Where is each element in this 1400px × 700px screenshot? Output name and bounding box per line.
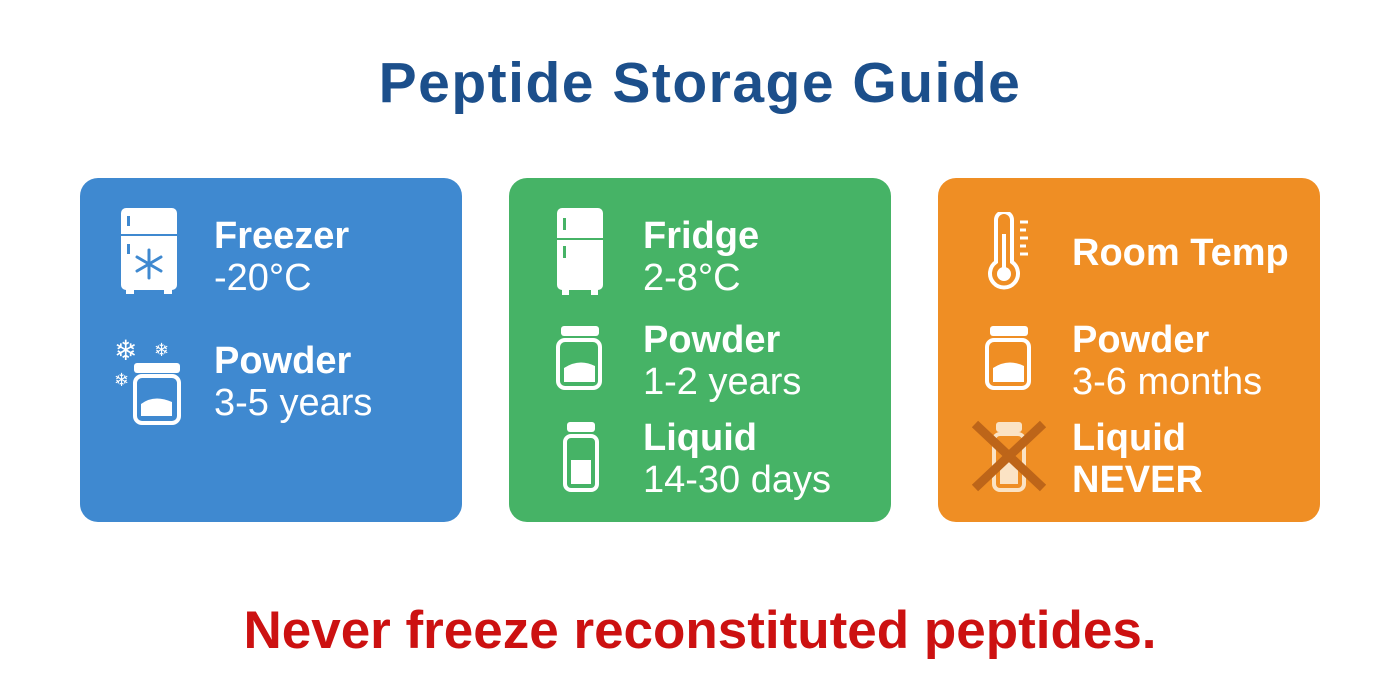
title: Peptide Storage Guide (379, 51, 1021, 115)
icon: powder jar with snowflakes: ❄ (154, 340, 169, 360)
text: fridge temp: Fridge (643, 215, 759, 257)
icon: crossed-out vial (972, 420, 1046, 492)
icon: liquid vial (563, 422, 599, 492)
text: freezer temp (214, 215, 349, 299)
text: liquid: 14-30 days (643, 459, 831, 501)
text: powder: 1-2 years (643, 361, 801, 403)
panel: room temp (938, 178, 1320, 522)
text: freezer temp: Freezer (214, 215, 349, 257)
icon: thermometer (988, 212, 1028, 290)
text: powder: Powder (1072, 319, 1209, 361)
icon: fridge (557, 208, 603, 295)
icon: powder jar (985, 326, 1031, 390)
text: liquid never: Liquid (1072, 417, 1186, 459)
text: room temp: Room Temp (1072, 232, 1289, 274)
text: liquid (643, 417, 831, 501)
text: powder (1072, 319, 1262, 403)
text: fridge temp (643, 215, 759, 299)
icon: freezer (121, 208, 177, 294)
text: liquid never (1072, 417, 1203, 501)
text: powder (643, 319, 801, 403)
text: powder (214, 340, 372, 424)
warning text: Never freeze reconstituted peptides. (243, 601, 1157, 660)
icon: powder jar with snowflakes: ❄ (114, 370, 129, 390)
text: liquid never: NEVER (1072, 459, 1203, 501)
icon: powder jar with snowflakes (114, 336, 181, 425)
text: powder: Powder (643, 319, 780, 361)
text: powder: Powder (214, 340, 351, 382)
text: freezer temp: -20°C (214, 257, 312, 299)
text: liquid: Liquid (643, 417, 757, 459)
icon: powder jar (556, 326, 602, 390)
text: fridge temp: 2-8°C (643, 257, 741, 299)
text: powder: 3-5 years (214, 382, 372, 424)
panel: fridge (509, 178, 891, 522)
panel: freezer (80, 178, 462, 522)
text: powder: 3-6 months (1072, 361, 1262, 403)
